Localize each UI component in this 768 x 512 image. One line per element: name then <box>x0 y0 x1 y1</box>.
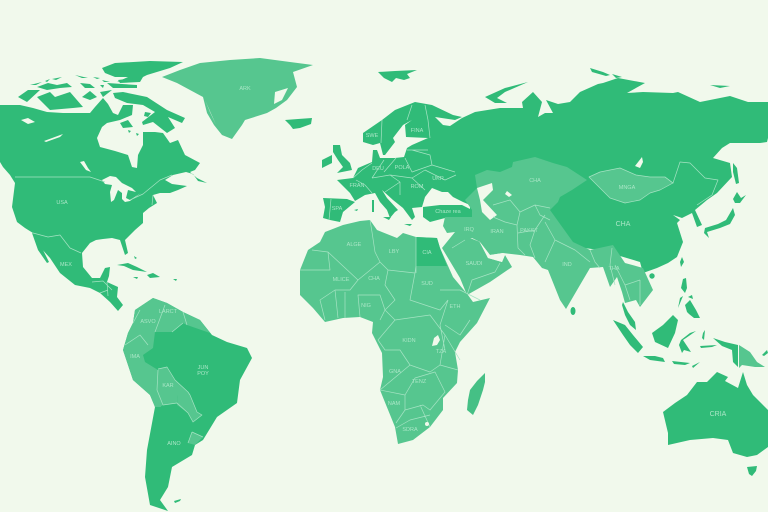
label: Peru: IMA <box>130 354 140 360</box>
label: Romania: ROM <box>411 184 424 190</box>
region: Russia, China and Europe mainland <box>337 78 768 273</box>
Aral Sea <box>505 191 512 197</box>
Baja California <box>32 233 49 263</box>
label: China: CHA <box>616 221 631 228</box>
label: Zambia: TENZ <box>412 379 427 385</box>
region: South America <box>123 298 252 511</box>
label: France: FRAN <box>350 183 365 189</box>
Caspian Sea <box>477 183 497 220</box>
label: Ukraine: UKR <box>432 176 444 182</box>
region: Arabian Peninsula <box>442 227 512 295</box>
region: New Guinea <box>713 338 768 368</box>
label: Mali: MLICE <box>333 277 350 283</box>
South America borders <box>125 305 203 443</box>
label: Saudi Arabia: SAUDI <box>466 261 483 267</box>
Lake Victoria <box>432 335 440 346</box>
Great Lakes <box>102 176 141 202</box>
region: Greenland <box>162 58 313 139</box>
label: Mexico: MEX <box>60 262 72 268</box>
label: Spain: SPA <box>332 206 343 212</box>
region: Mediterranean islands <box>354 200 412 226</box>
region: North America <box>0 98 207 311</box>
region: Indonesia and Philippines <box>613 278 717 368</box>
Mongolia <box>589 168 673 203</box>
label: Colombia: ASVO <box>140 319 156 325</box>
Bolivia <box>155 367 190 407</box>
region: Malay Peninsula and Hainan <box>622 273 655 330</box>
label: Nigeria: NIG <box>361 303 371 309</box>
region: Africa <box>300 220 490 444</box>
Persian Gulf <box>479 241 505 262</box>
region: South America: POY <box>197 371 209 377</box>
Iberia border <box>329 199 331 220</box>
label: Argentina: AINO <box>167 441 181 447</box>
label: DR Congo: KIDN <box>402 338 416 344</box>
label: Australia: CRIA <box>710 411 727 418</box>
label: Kazakhstan: CHA <box>529 178 541 184</box>
Lake Baikal <box>635 157 643 168</box>
label: Greenland: ARK <box>239 86 251 92</box>
label: Iran: IRAN <box>490 229 504 235</box>
label: Ethiopia: ETH <box>450 304 461 310</box>
label: Norway: SWE <box>366 133 379 139</box>
region borders <box>493 200 640 305</box>
Falkland Islands <box>174 499 181 503</box>
Europe country borders and labels <box>350 105 456 195</box>
region: Caribbean islands <box>117 256 177 281</box>
label: Finland: FINA <box>411 128 424 134</box>
region: Japan and Sakhalin <box>680 163 746 267</box>
region: Iberia <box>323 198 355 222</box>
Lesotho <box>425 422 429 426</box>
label: Namibia: NAM <box>388 401 401 407</box>
label: Bolivia: KAR <box>162 383 174 389</box>
label: Chad: CHA <box>368 276 380 282</box>
label: Iraq: IRQ <box>464 227 475 233</box>
label: Brazil: JUN <box>198 365 208 371</box>
region: British Isles and Arctic islands <box>322 68 730 173</box>
label: Sudan: SUD <box>421 281 433 287</box>
region: Madagascar <box>467 373 485 415</box>
region: Turkey <box>423 205 472 222</box>
label: Turkey: Chaze rea <box>435 209 462 215</box>
Paraguay <box>177 395 202 422</box>
label: Poland: POLA <box>395 165 410 171</box>
north-west countries <box>123 298 210 407</box>
label: Algeria: ALGE <box>347 242 362 248</box>
label: Mongolia: MNGA <box>619 185 636 191</box>
Uruguay <box>188 432 203 445</box>
label: USA: USA <box>56 200 68 206</box>
label: India: IND <box>562 262 572 268</box>
Canada-USA and Mexico borders <box>15 175 172 296</box>
region: Tasmania <box>747 466 757 476</box>
label: Germany: DEU <box>372 166 384 172</box>
region: Iceland <box>285 118 312 129</box>
Egypt <box>416 237 447 266</box>
Africa country borders <box>300 220 480 428</box>
label: South Africa: SDRA <box>402 427 418 433</box>
China north-east border <box>665 162 718 205</box>
label: Pakistan: PAKST <box>520 228 538 234</box>
region: Australia <box>663 372 768 457</box>
label: Tanzania: TZA <box>436 349 447 355</box>
region: Sri Lanka <box>570 307 576 315</box>
label: Egypt: CIA <box>422 250 432 256</box>
lakes of Canada <box>21 118 91 172</box>
label: Libya: LBY <box>389 249 400 255</box>
region: Central Asia, Middle East and South Asia <box>443 157 673 309</box>
region: Canadian Arctic islands <box>18 61 185 136</box>
label: Thailand: THA <box>608 266 620 272</box>
label: Venezuela: LARCT <box>159 309 178 315</box>
label: Angola: GNA <box>389 369 401 375</box>
